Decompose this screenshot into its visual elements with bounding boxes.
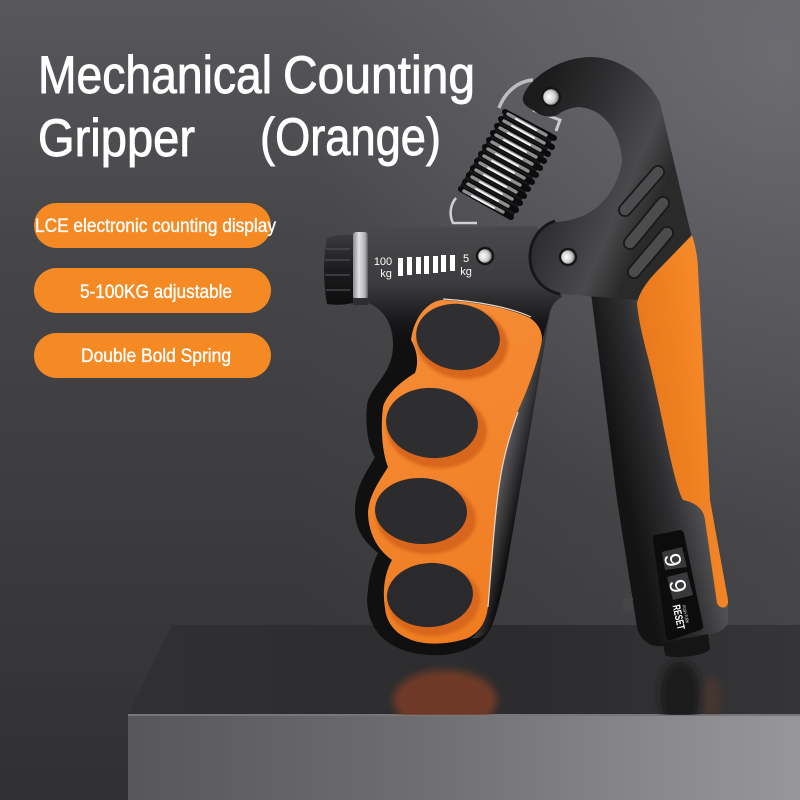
feature pill: LCE electronic counting display: LCE electronic counting display [35,216,276,237]
rivets [477,88,576,265]
finger hole 3 [373,476,469,546]
feature pill: LCE electronic counting display [34,203,276,248]
resistance scale: 100 [374,256,392,268]
pivot plate [530,221,560,294]
orange lever panel [637,235,728,608]
lever upper hook [523,57,699,300]
feature pill: Double Bold Spring [34,333,271,378]
counter display: RESET [670,604,687,631]
grip highlight strip [472,312,550,638]
finger hole 2 [383,384,481,462]
table block [128,625,800,800]
spring assembly [451,80,560,223]
finger hole 1 [412,298,504,376]
counter display: 9 [656,551,685,570]
resistance scale [374,253,472,280]
title: Gripper [38,109,195,168]
grip body [355,226,562,655]
adjustment knob [324,232,368,305]
bottom cap [663,634,710,657]
side stub [623,598,633,612]
counter display: PUSH-TURN [681,605,690,623]
finger hole 4 [385,560,475,630]
feature pill: 5-100KG adjustable: 5-100KG adjustable [80,282,232,303]
hand gripper product illustration [324,57,728,657]
title [38,46,475,168]
feature pill: Double Bold Spring: Double Bold Spring [81,346,231,367]
resistance scale: 5 [463,253,469,265]
resistance scale: kg [380,268,392,280]
orange finger grip [368,298,542,644]
resistance scale: kg [460,266,472,278]
hole shading [374,301,513,639]
counter display: 9 [661,577,690,596]
counter display [653,530,703,640]
grip slots [625,172,667,272]
title: (Orange) [260,108,441,167]
lever lower arm [590,270,728,646]
feature pill: 5-100KG adjustable [34,268,271,313]
title: Counting [283,46,475,105]
title: Mechanical [38,46,272,105]
